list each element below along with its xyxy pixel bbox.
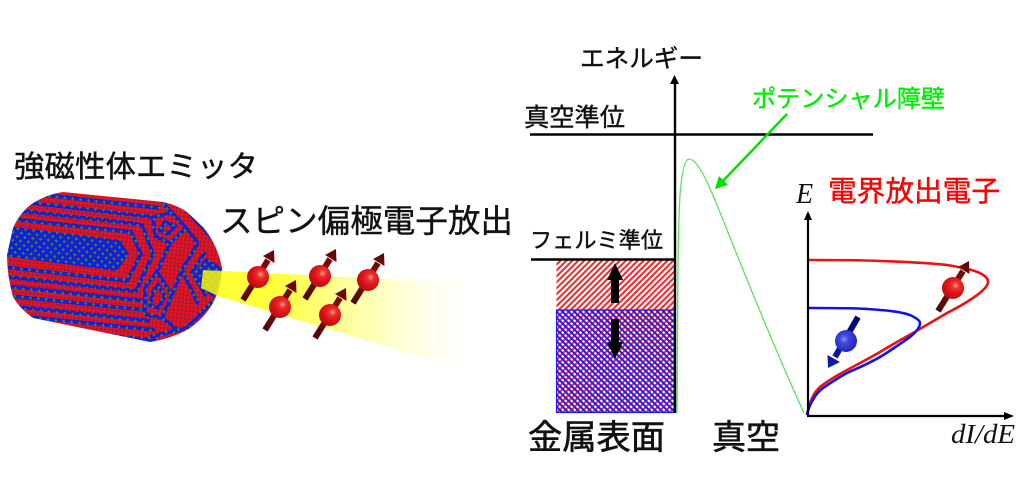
label: energy axis: エネルギー <box>580 46 703 73</box>
energy axis arrow <box>670 75 679 413</box>
yellow light beam <box>201 270 472 372</box>
arrow: spin up in metal <box>607 263 623 303</box>
metal band: both-spin crosshatch <box>556 310 674 412</box>
electron 2 <box>265 280 296 330</box>
potential barrier curve <box>677 159 804 413</box>
illustration: ferromagnetic emitter cylinder <box>7 192 222 342</box>
red spin-up electron <box>938 261 970 311</box>
heading: spin-polarized electron emission: スピン偏極電子放出 <box>220 203 513 239</box>
label: Fermi level: フェルミ準位 <box>530 228 663 253</box>
graph title: field-emitted electrons: 電界放出電子 <box>828 176 1000 208</box>
arrow: spin down in metal <box>607 319 623 359</box>
vacuum level line <box>530 133 873 136</box>
graph axes <box>804 211 1014 420</box>
graph y label E: E <box>795 179 813 210</box>
label: potential barrier: ポテンシャル障壁 <box>752 86 945 113</box>
electron 3 <box>305 249 336 299</box>
blue spin-down distribution curve <box>807 308 920 415</box>
red spin-up distribution curve <box>807 260 988 415</box>
Fermi level line <box>531 258 675 261</box>
electron 5 <box>353 253 384 303</box>
blue spin-down electron <box>828 317 858 368</box>
metal band: spin-up hatch <box>556 260 674 310</box>
green arrow to barrier <box>715 114 787 189</box>
graph x label dI/dE: dI/dE <box>951 419 1016 449</box>
label: vacuum: 真空 <box>712 419 780 457</box>
electron 4 <box>315 288 346 338</box>
label: metal surface: 金属表面 <box>528 419 665 457</box>
label: vacuum level: 真空準位 <box>524 104 625 132</box>
title: ferromagnetic emitter: 強磁性体エミッタ <box>14 151 258 184</box>
electron 1 <box>243 250 274 300</box>
